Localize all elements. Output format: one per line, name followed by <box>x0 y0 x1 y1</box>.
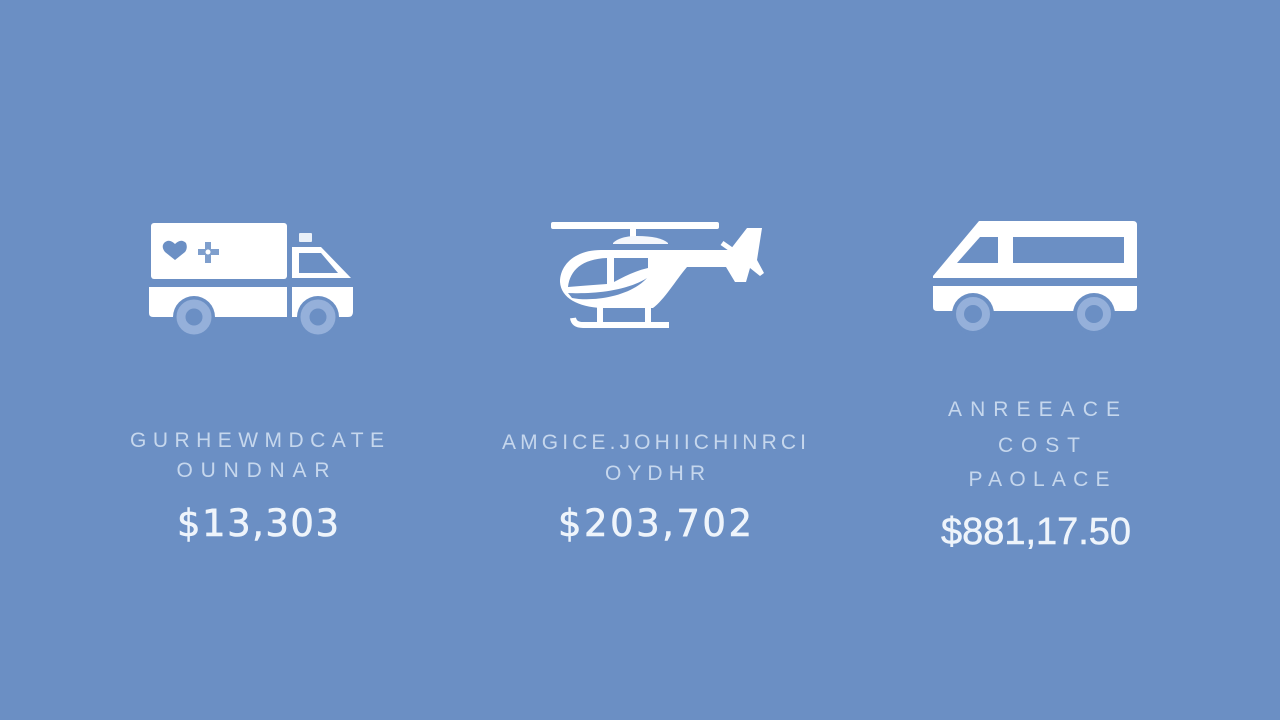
value: helicopter cost: $203,702 <box>558 502 752 545</box>
label: ambulance cost: GURHEWMDCATE <box>130 429 384 452</box>
label: ambulance cost: OUNDNAR <box>176 459 330 482</box>
icon: van <box>933 221 1137 335</box>
value: van cost: $881,17.50 <box>941 511 1131 553</box>
label: helicopter cost: AMGICE.JOHIICHINRCI <box>502 431 806 454</box>
label: helicopter cost: OYDHR <box>605 462 705 485</box>
label: van cost <box>948 398 1120 491</box>
icon: helicopter <box>551 222 764 325</box>
label: ambulance cost <box>130 429 384 482</box>
label: van cost: ANREEACE <box>948 398 1120 421</box>
label: van cost: PAOLACE <box>968 468 1110 491</box>
label: helicopter cost <box>502 431 806 485</box>
value: ambulance cost: $13,303 <box>177 502 339 545</box>
icon: ambulance <box>149 223 353 338</box>
label: van cost: COST <box>998 434 1080 457</box>
